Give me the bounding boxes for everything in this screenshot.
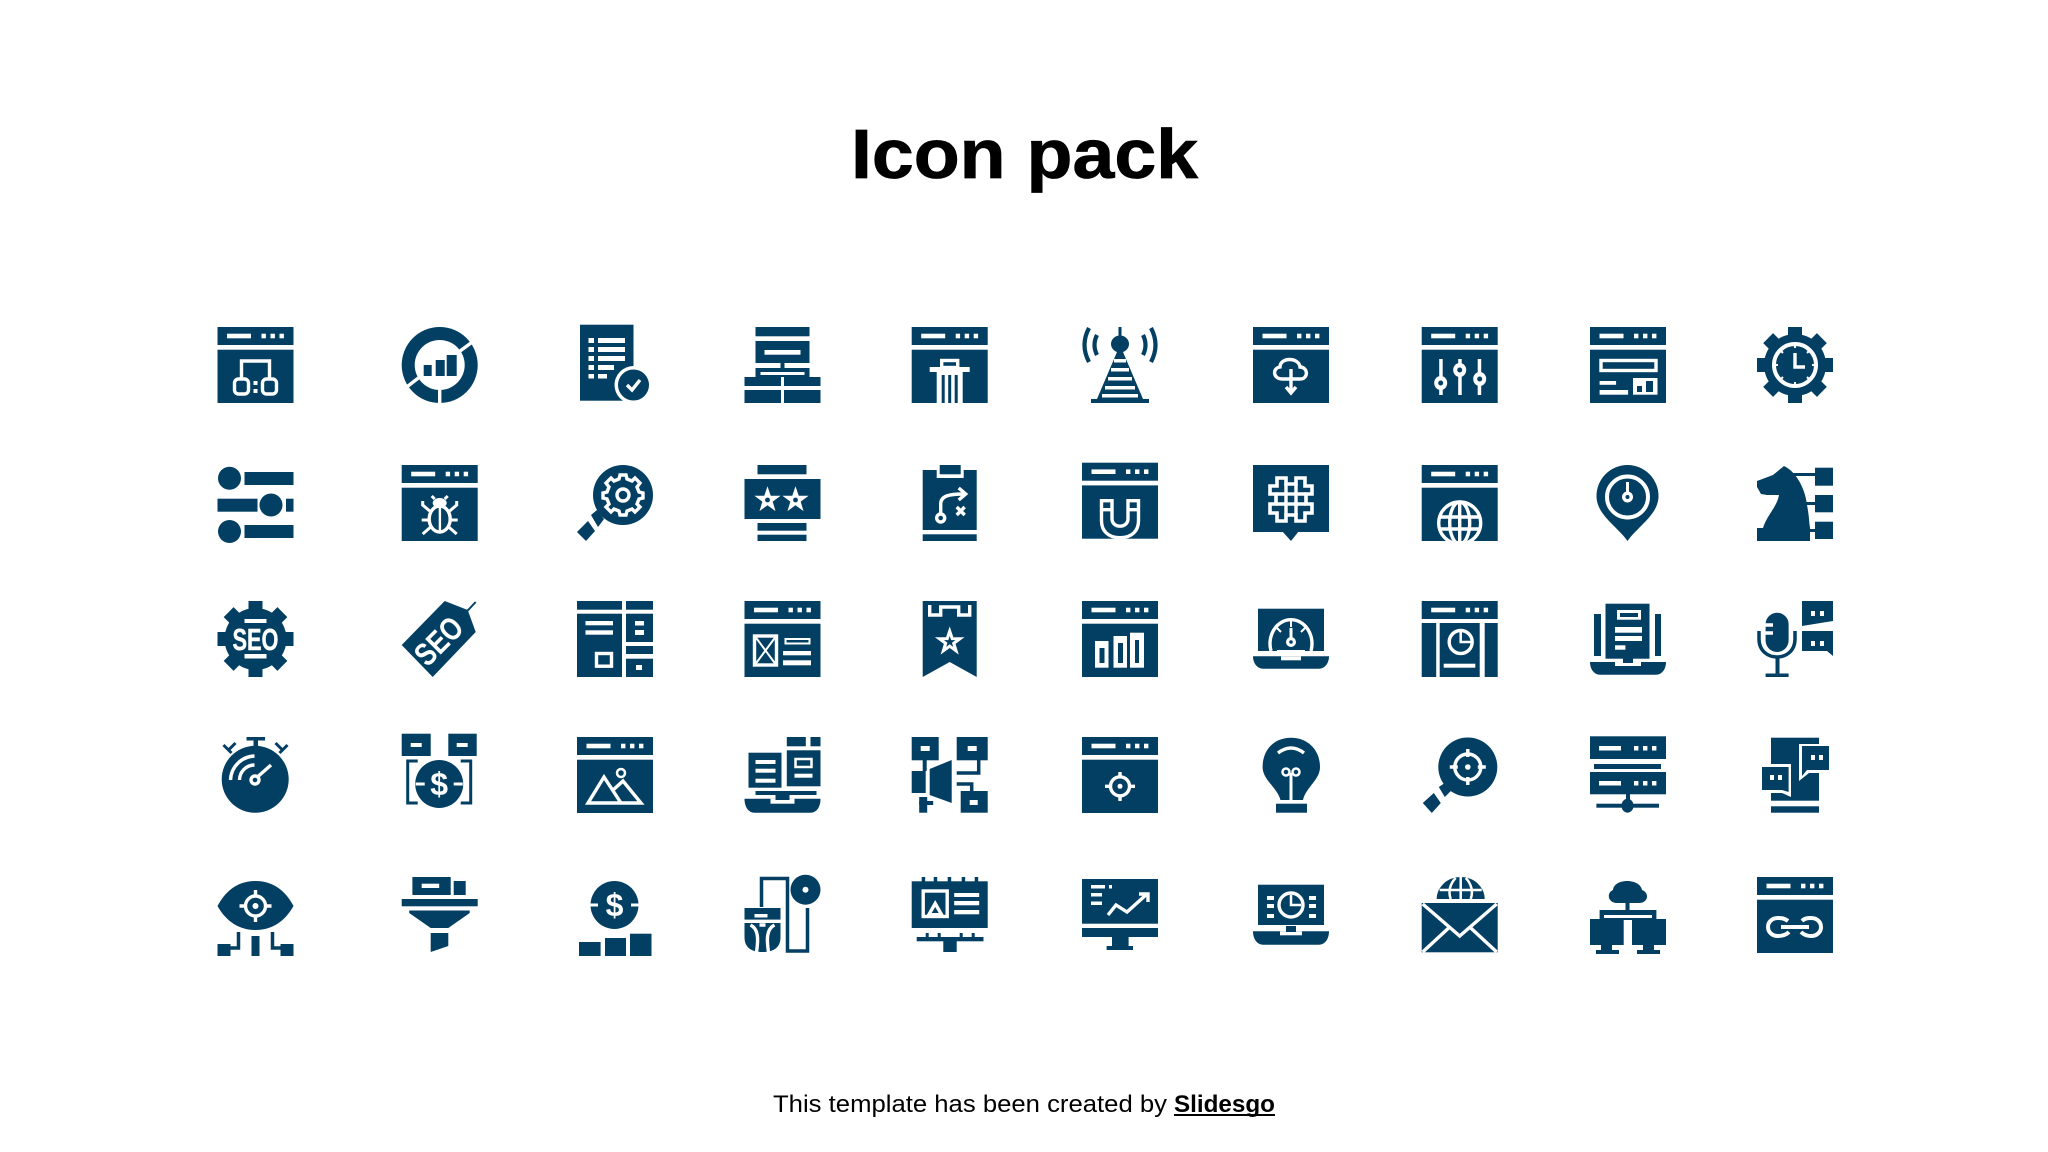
icon: browser with pie chart panel — [1422, 601, 1498, 677]
icon: envelope with globe — [1422, 877, 1498, 952]
icon: chess knight with nodes — [1757, 466, 1833, 541]
icon: browser with bar chart — [1082, 601, 1158, 677]
icon: SEO price tag: SEO — [407, 609, 471, 673]
icon: ribbon bookmark with star — [923, 601, 977, 677]
icon: browser with org chart — [218, 327, 294, 403]
icon: page layout blocks — [577, 601, 653, 677]
icon: slider toggles — [218, 467, 294, 543]
icon: browser with globe — [1422, 465, 1498, 545]
icon: laptop with documents — [744, 737, 820, 813]
icon: billboard — [912, 877, 988, 952]
icon: browser with target — [1082, 737, 1158, 813]
icon: laptop with gauge — [1253, 609, 1329, 669]
icon: microphone with chat bubbles — [1759, 601, 1833, 677]
icon: magnifier with target — [1423, 738, 1497, 813]
icon: megaphone with nodes — [912, 737, 988, 813]
icon: marketing funnel — [402, 877, 478, 952]
icon: coin with two nodes — [402, 734, 477, 808]
icon: phone with ear bud and path — [744, 875, 820, 952]
icon: laptop with document — [1590, 604, 1666, 675]
icon grid — [218, 325, 1833, 956]
icon: browser with cloud download — [1253, 327, 1329, 403]
icon: browser with trash bin — [912, 327, 988, 403]
icon: laptop with pie chart — [1253, 885, 1329, 945]
icon: browser with layout blocks — [1590, 327, 1666, 403]
icon: coin with two nodes: $ — [430, 766, 448, 802]
icon: monitor with growth chart — [1082, 879, 1158, 950]
icon: browser with wireframe — [744, 601, 820, 677]
icon: light bulb — [1263, 738, 1320, 813]
icon: clipboard with route — [923, 465, 977, 541]
icon: browser with chain link — [1757, 877, 1833, 953]
icon: browser with magnet — [1082, 463, 1158, 539]
icon: server network — [1590, 736, 1666, 813]
icon: stopwatch — [222, 737, 289, 813]
icon: coin with rising blocks — [579, 881, 652, 956]
icon: browser with mountain image — [577, 737, 653, 813]
title: Icon pack — [851, 115, 1198, 193]
icon: SEO gear — [218, 601, 294, 677]
icon: radio tower — [1084, 327, 1156, 403]
icon: donut chart with bars — [402, 327, 478, 403]
icon: checklist document — [580, 325, 652, 404]
icon: phone with chat bubbles — [1759, 738, 1832, 813]
icon: browser with sliders — [1422, 327, 1498, 403]
footer credit: This template has been created by — [773, 1091, 1167, 1118]
icon: browser with bug — [402, 465, 478, 541]
icon: speech bubble with chip — [1253, 465, 1329, 541]
icon: gear with clock — [1757, 327, 1833, 403]
icon: magnifier with gear — [577, 465, 653, 541]
footer credit: Slidesgo — [1174, 1091, 1275, 1118]
icon: stacked blocks hierarchy — [744, 327, 820, 403]
icon: review panel with two stars — [744, 465, 820, 541]
icon: map pin with gauge — [1596, 465, 1658, 541]
icon: coin with rising blocks: $ — [606, 887, 624, 923]
icon: SEO gear: SEO — [232, 622, 278, 657]
icon: cloud with networked monitors — [1590, 881, 1666, 954]
icon: eye with target and nodes — [218, 881, 294, 956]
